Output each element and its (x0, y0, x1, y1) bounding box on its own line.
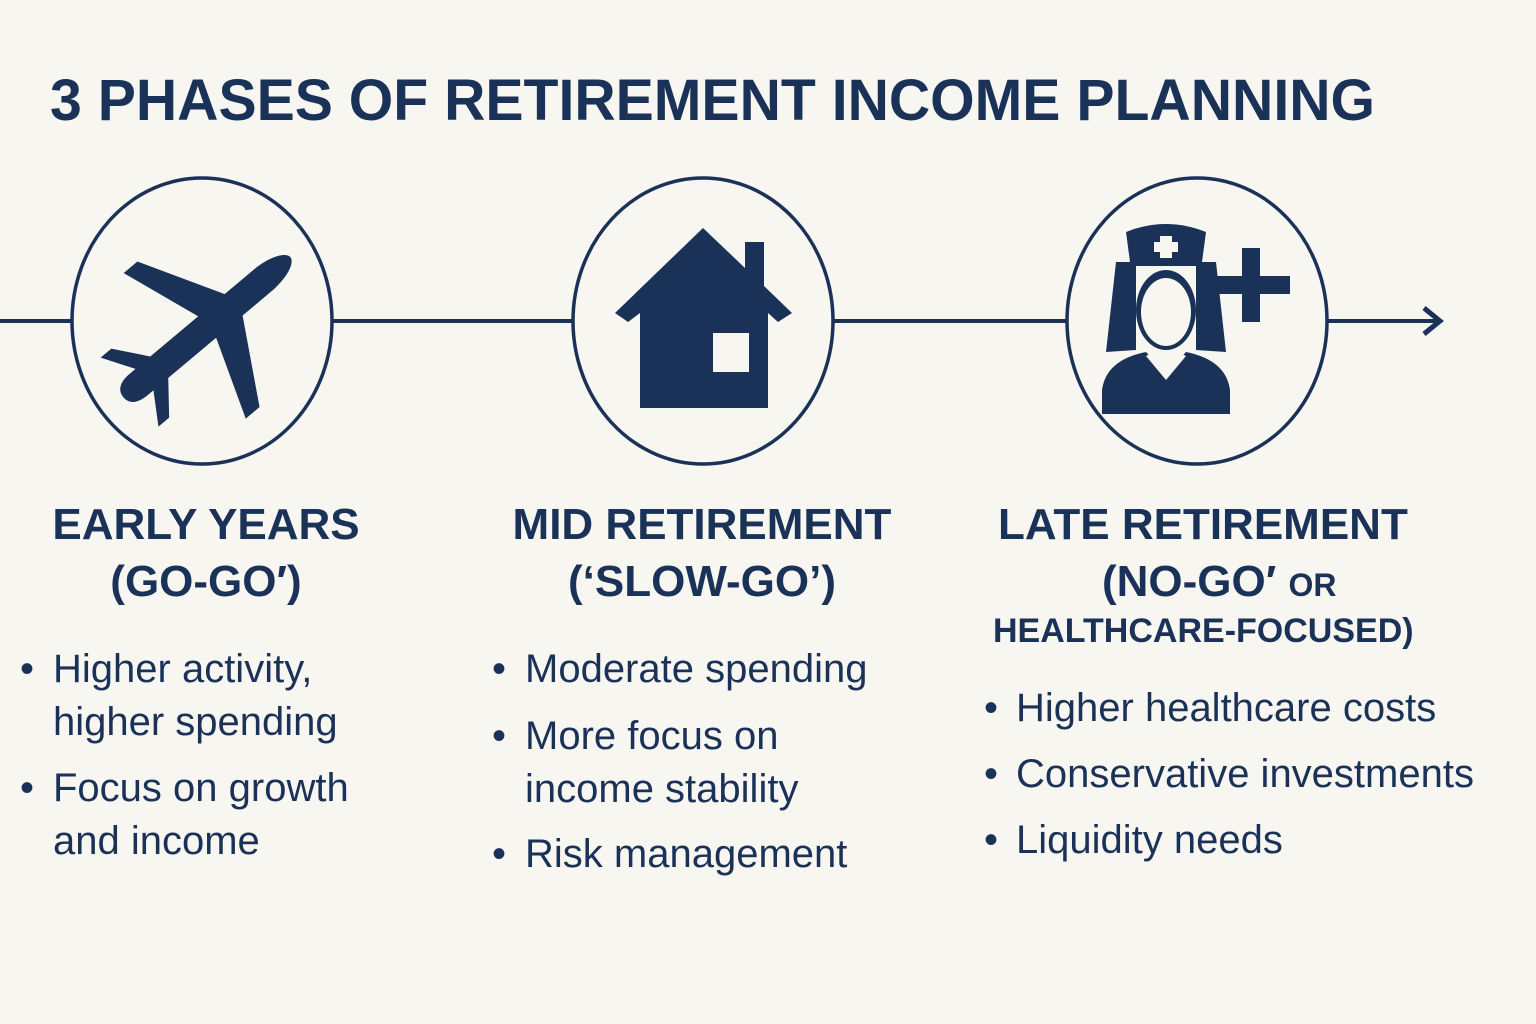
column 2 bullets: • (492, 832, 506, 876)
column 1 bullets: and income (53, 819, 260, 863)
column 2 bullets: More focus on (525, 714, 778, 758)
icon: house (573, 178, 833, 464)
column 2 bullets: • (492, 714, 506, 758)
column 1 heading: EARLY YEARS (52, 500, 360, 549)
column 3 heading: HEALTHCARE-FOCUSED) (993, 612, 1414, 650)
column 3 heading: LATE RETIREMENT (998, 500, 1408, 549)
column 3 bullets: Liquidity needs (1016, 818, 1283, 862)
column 3 bullets (984, 686, 1474, 862)
column 2 bullets: income stability (525, 767, 798, 811)
column 3 bullets: Higher healthcare costs (1016, 686, 1436, 730)
column 3 bullets: • (984, 686, 998, 730)
timeline arrow (0, 308, 1440, 334)
title: 3 PHASES OF RETIREMENT INCOME PLANNING (50, 68, 1375, 133)
icon: nurse (1067, 178, 1327, 464)
icon: airplane (62, 178, 351, 470)
column 1 bullets (20, 647, 349, 863)
column 2 heading: MID RETIREMENT (513, 500, 892, 549)
column 1 heading (52, 500, 360, 606)
column 1 bullets: Higher activity, (53, 647, 312, 691)
column 3 bullets: Conservative investments (1016, 752, 1474, 796)
column 3 bullets: • (984, 818, 998, 862)
column 1 bullets: • (20, 647, 34, 691)
column 1 heading: (GO-GO′) (110, 557, 302, 606)
column 3 bullets: • (984, 752, 998, 796)
column 2 bullets (492, 647, 867, 876)
column 3 heading (993, 500, 1414, 650)
column 3 heading: (NO-GO′ OR (1102, 557, 1337, 606)
column 1 bullets: Focus on growth (53, 766, 349, 810)
column 2 bullets: Risk management (525, 832, 847, 876)
column 2 bullets: Moderate spending (525, 647, 867, 691)
column 2 heading: (‘SLOW-GO’) (568, 557, 836, 606)
column 1 bullets: • (20, 766, 34, 810)
column 2 heading (513, 500, 892, 606)
column 2 bullets: • (492, 647, 506, 691)
column 1 bullets: higher spending (53, 700, 338, 744)
